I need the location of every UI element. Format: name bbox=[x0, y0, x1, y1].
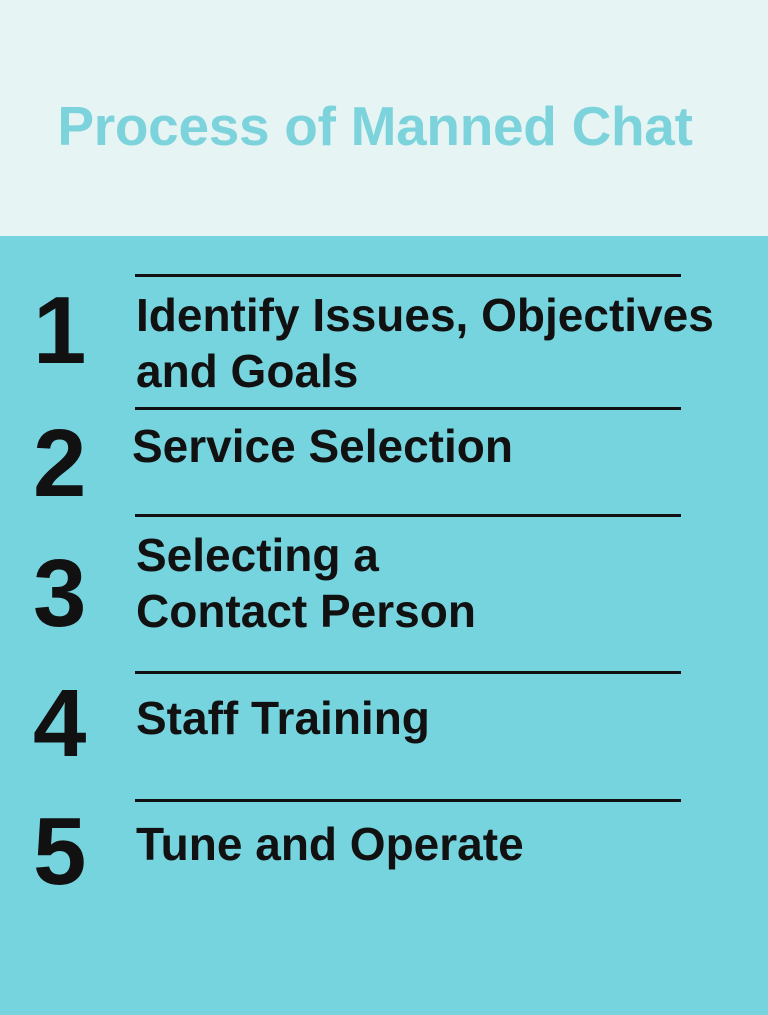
step 4 text: Staff Training bbox=[136, 692, 430, 744]
header band bbox=[0, 0, 768, 236]
step 1 text: and Goals bbox=[136, 345, 358, 397]
step 5 text: Tune and Operate bbox=[136, 818, 524, 870]
title: Process of Manned Chat bbox=[57, 95, 693, 157]
step 3 text: Contact Person bbox=[136, 585, 476, 637]
step 2 number: 2 bbox=[33, 410, 86, 517]
step 3 number: 3 bbox=[33, 540, 86, 647]
step 1 number: 1 bbox=[33, 277, 86, 384]
step 4 number: 4 bbox=[33, 670, 86, 777]
step 3 text bbox=[136, 529, 476, 637]
panel: steps bbox=[0, 236, 768, 1015]
step 1 text: Identify Issues, Objectives bbox=[136, 289, 714, 341]
step 3 text: Selecting a bbox=[136, 529, 379, 581]
step 5 number: 5 bbox=[33, 798, 86, 905]
step 2 text: Service Selection bbox=[132, 420, 513, 472]
step 1 text bbox=[136, 289, 714, 397]
